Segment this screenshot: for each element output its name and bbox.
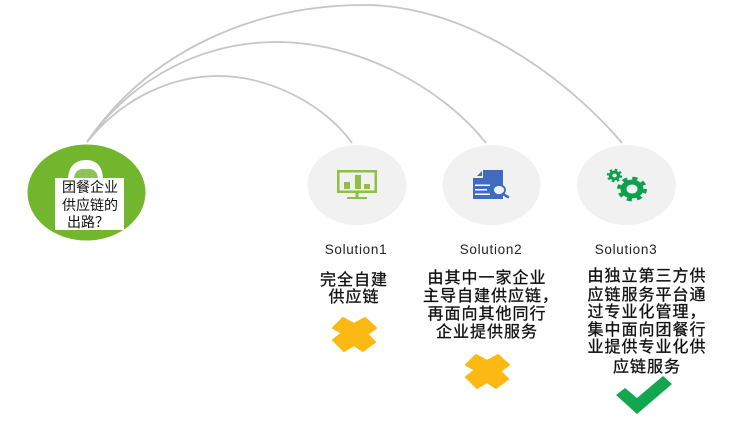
question text box xyxy=(55,178,124,230)
central question node xyxy=(28,144,146,240)
description: 应链服务 xyxy=(613,357,681,376)
icon: person silhouette xyxy=(68,160,103,180)
description: 应链服务平台通 xyxy=(587,285,707,304)
panel: solution 2 xyxy=(423,145,559,388)
arc to solution 2 xyxy=(87,42,486,143)
description: 供应链 xyxy=(328,287,380,306)
description: 过专业化管理， xyxy=(587,303,707,321)
description: 企业提供服务 xyxy=(436,323,538,341)
icon: monitor with bar chart xyxy=(337,170,377,199)
heading: Solution1 xyxy=(325,242,387,257)
description: 业提供专业化供 xyxy=(587,338,707,356)
description: 由其中一家企业 xyxy=(427,269,547,287)
connecting arcs xyxy=(87,5,622,143)
heading: Solution3 xyxy=(595,242,657,257)
description: 主导自建供应链， xyxy=(423,286,559,305)
description: 由独立第三方供 xyxy=(587,267,707,285)
icon: yellow cross xyxy=(466,355,509,388)
icon: green check mark xyxy=(616,376,672,414)
description: 再面向其他同行 xyxy=(427,305,547,323)
question text: 供应链的 xyxy=(62,197,118,213)
question text: 出路？ xyxy=(67,214,109,230)
icon circle xyxy=(308,145,406,225)
description: 完全自建 xyxy=(320,271,388,289)
question text: 团餐企业 xyxy=(62,179,118,195)
icon circle xyxy=(442,145,540,225)
heading: Solution2 xyxy=(460,242,522,257)
icon: yellow cross xyxy=(333,318,376,351)
icon: document with magnifier xyxy=(473,170,508,199)
icon circle xyxy=(577,145,676,225)
arc to solution 3 xyxy=(87,5,622,143)
panel: solution 1 xyxy=(308,145,406,351)
panel: solution 3 xyxy=(577,145,707,414)
green circle xyxy=(28,144,146,240)
icon: gears xyxy=(608,170,645,200)
arc to solution 1 xyxy=(87,76,352,143)
description: 集中面向团餐行 xyxy=(587,321,707,339)
